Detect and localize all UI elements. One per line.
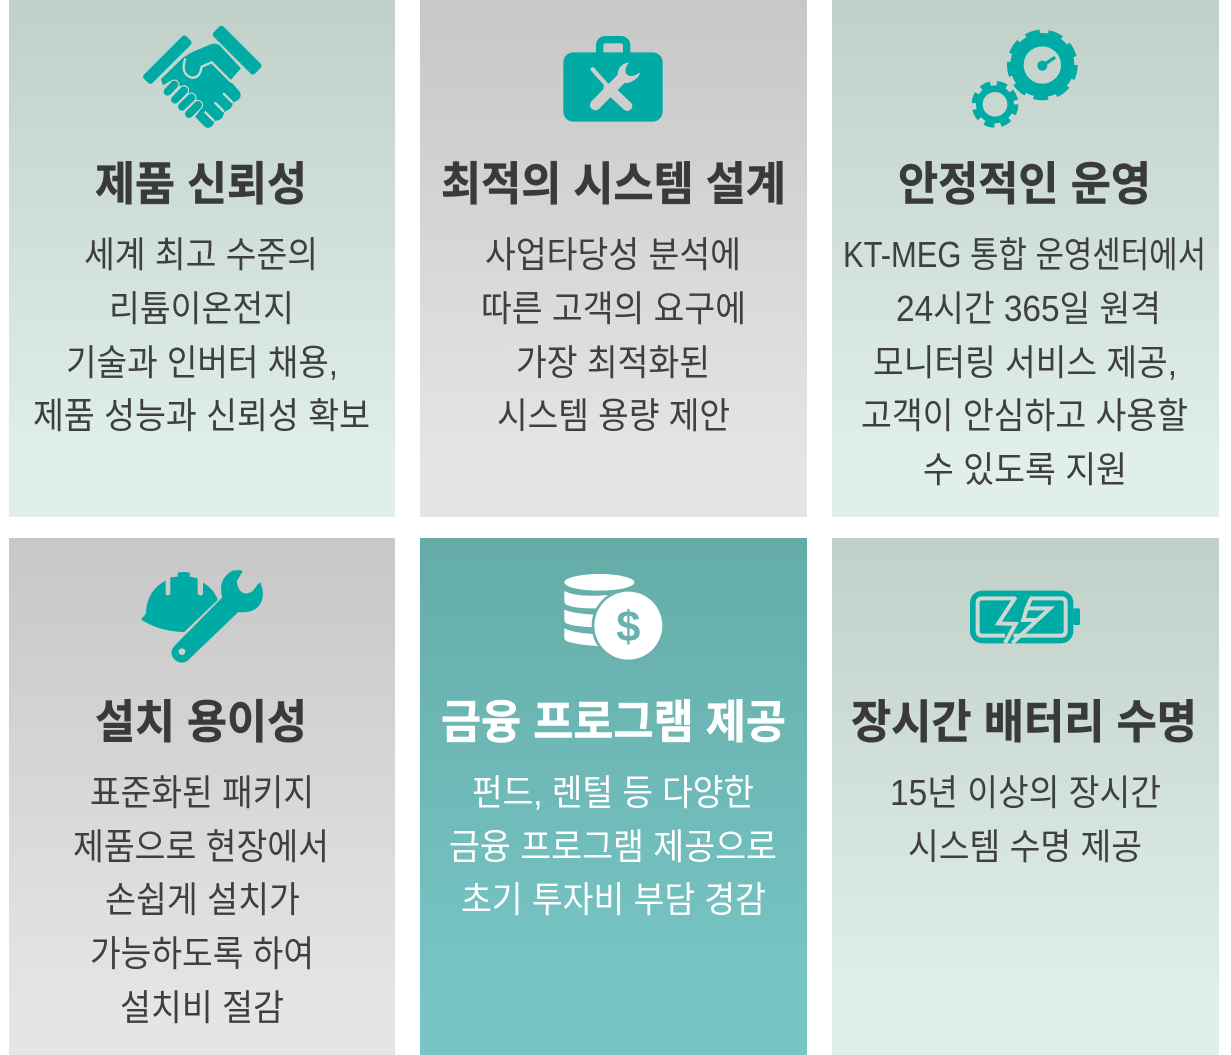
text block: 제품으로 현장에서 xyxy=(73,826,329,867)
text block: 기술과 인버터 채용, xyxy=(66,342,338,383)
text block: 사업타당성 분석에 xyxy=(485,234,741,275)
panel: financial program xyxy=(420,538,807,1055)
icon: battery xyxy=(970,591,1080,643)
text block: 24시간 365일 원격 xyxy=(896,288,1161,329)
icon: gears xyxy=(975,33,1074,125)
title: 안정적인 운영 xyxy=(898,158,1151,210)
icon: coins with dollar xyxy=(564,574,662,660)
title: 설치 용이성 xyxy=(95,696,307,748)
panel: long battery life xyxy=(832,538,1219,1055)
text block: 금융 프로그램 제공으로 xyxy=(449,826,777,867)
text block xyxy=(890,772,1161,867)
text block: 초기 투자비 부담 경감 xyxy=(461,879,766,920)
text block: 설치비 절감 xyxy=(120,987,284,1028)
text block: 제품 성능과 신뢰성 확보 xyxy=(33,395,370,436)
title: 금융 프로그램 제공 xyxy=(441,696,786,748)
panel: stable operation xyxy=(832,0,1219,517)
text block xyxy=(449,772,777,920)
text block: 표준화된 패키지 xyxy=(90,772,314,813)
panel: optimal system design xyxy=(420,0,807,517)
text block: 세계 최고 수준의 xyxy=(84,234,318,275)
text block: 모니터링 서비스 제공, xyxy=(873,342,1177,383)
text block xyxy=(843,234,1206,490)
text block: 손쉽게 설치가 xyxy=(105,879,300,920)
text block xyxy=(33,234,370,436)
text block: 가능하도록 하여 xyxy=(90,933,314,974)
text block: 시스템 용량 제안 xyxy=(497,395,730,436)
panel: easy installation xyxy=(9,538,395,1055)
text block xyxy=(481,234,746,436)
icon: coins with dollar: $ xyxy=(616,603,640,651)
text block: 가장 최적화된 xyxy=(516,342,710,383)
text block xyxy=(73,772,329,1028)
icon: toolbox xyxy=(563,40,663,122)
panel: product reliability xyxy=(9,0,395,517)
title: 최적의 시스템 설계 xyxy=(441,158,786,210)
title: 제품 신뢰성 xyxy=(95,158,307,210)
icon: handshake xyxy=(142,25,263,127)
text block: 펀드, 렌털 등 다양한 xyxy=(472,772,754,813)
title: 장시간 배터리 수명 xyxy=(851,696,1197,748)
text block: 시스템 수명 제공 xyxy=(908,826,1142,867)
text block: 15년 이상의 장시간 xyxy=(890,772,1161,813)
text block: 수 있도록 지원 xyxy=(923,449,1127,490)
text block: 고객이 안심하고 사용할 xyxy=(861,395,1188,436)
text block: 리튬이온전지 xyxy=(109,288,294,329)
text block: 따른 고객의 요구에 xyxy=(481,288,746,329)
icon: helmet and wrench xyxy=(141,570,263,663)
